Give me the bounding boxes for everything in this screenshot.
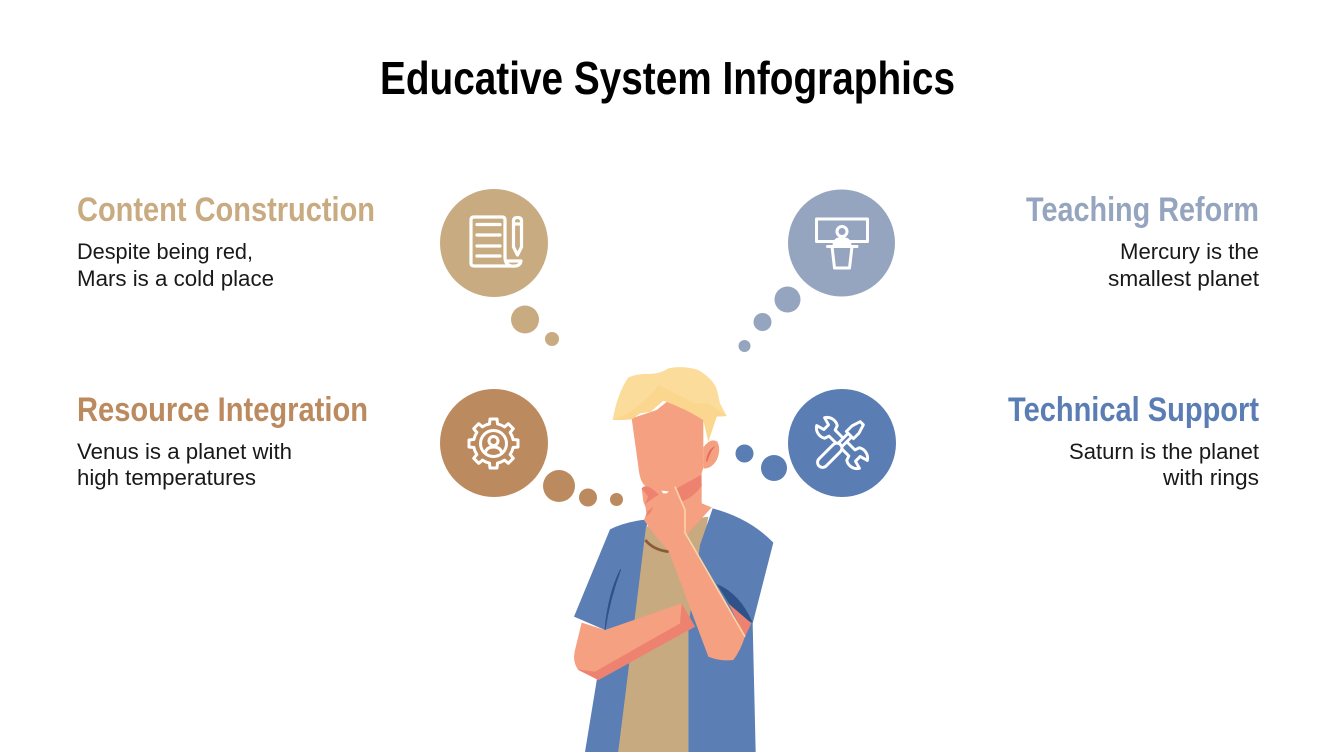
heading: content construction: Content Construction bbox=[77, 191, 375, 229]
jacket left panel bbox=[574, 519, 647, 752]
heading: resource integration: Resource Integration bbox=[77, 391, 368, 429]
neck shadow bbox=[677, 475, 702, 502]
forearm highlight bbox=[675, 487, 745, 637]
icon: gear with person badge bbox=[440, 389, 548, 497]
panel: teaching reform bbox=[1026, 191, 1259, 291]
text block: technical support bbox=[1069, 439, 1259, 490]
hair shade bbox=[613, 385, 727, 442]
text block: resource integration bbox=[77, 439, 292, 490]
t-shirt bbox=[618, 517, 708, 752]
jacket fold bbox=[605, 569, 621, 630]
icon: lectern speaker badge bbox=[788, 190, 895, 296]
lower arm shadow bbox=[577, 603, 695, 680]
text block: content construction bbox=[77, 239, 274, 291]
ear bbox=[703, 440, 719, 469]
illustration: thinking young man bbox=[574, 367, 773, 752]
sleeve lining bbox=[717, 584, 753, 623]
thought bubbles: teaching reform bbox=[738, 286, 800, 352]
text block: resource integration: Venus is a planet with bbox=[77, 439, 292, 464]
panel: resource integration bbox=[77, 391, 368, 490]
panel: technical support bbox=[1008, 391, 1259, 490]
jacket right panel bbox=[688, 508, 773, 752]
thought bubbles: content construction bbox=[511, 306, 559, 346]
fingers shading bbox=[642, 487, 659, 517]
thought bubbles: technical support bbox=[736, 444, 787, 481]
icon: wrench and screwdriver badge bbox=[788, 389, 896, 497]
text block: teaching reform bbox=[1108, 239, 1259, 291]
icon: document and pencil badge bbox=[440, 189, 548, 297]
ear shade bbox=[706, 446, 715, 462]
title: Educative System Infographics bbox=[380, 52, 955, 104]
text block: technical support: Saturn is the planet bbox=[1069, 439, 1259, 464]
text block: content construction: Mars is a cold place bbox=[77, 266, 274, 291]
forearm bbox=[668, 535, 745, 660]
text block: resource integration: high temperatures bbox=[77, 465, 256, 490]
white gap under chin bbox=[661, 491, 669, 497]
text block: teaching reform: Mercury is the bbox=[1120, 239, 1259, 264]
face bbox=[632, 397, 703, 490]
heading: teaching reform: Teaching Reform bbox=[1026, 191, 1259, 229]
text block: technical support: with rings bbox=[1162, 465, 1259, 490]
upper arm shade bbox=[728, 603, 751, 637]
hand bbox=[642, 486, 685, 551]
t-shirt collar bbox=[645, 540, 669, 552]
heading: technical support: Technical Support bbox=[1008, 391, 1259, 429]
panel: content construction bbox=[77, 191, 375, 291]
thought bubbles: resource integration bbox=[543, 470, 623, 506]
hair bbox=[613, 367, 727, 442]
text block: content construction: Despite being red, bbox=[77, 239, 253, 264]
text block: teaching reform: smallest planet bbox=[1108, 266, 1259, 291]
lower arm bbox=[574, 603, 695, 680]
neck bbox=[643, 472, 712, 550]
